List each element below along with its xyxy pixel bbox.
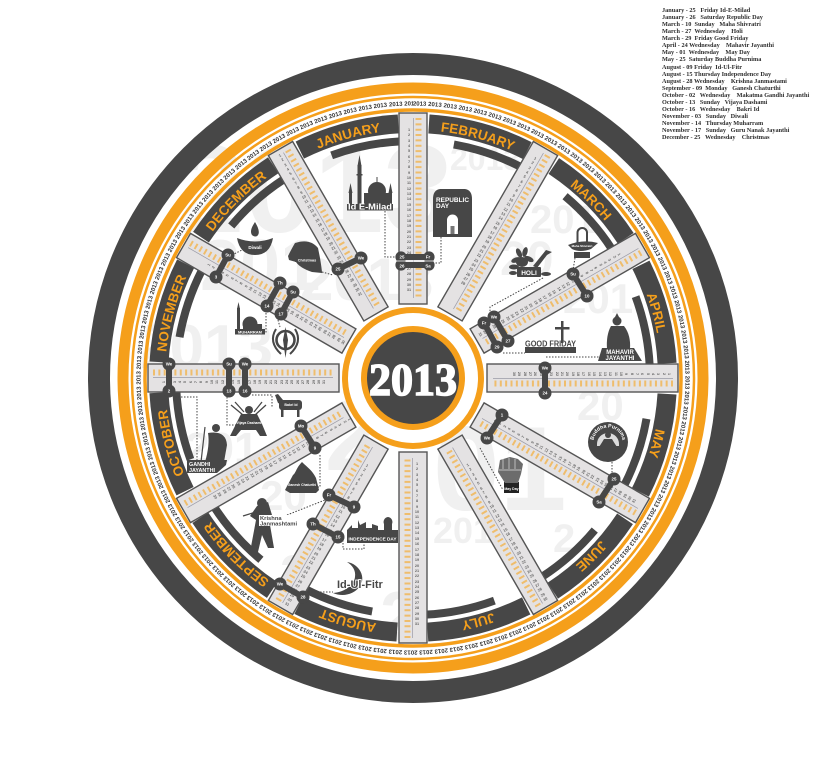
date marker: October 2: 2 (168, 389, 171, 394)
icon: Bakri Id goat: Bakri Id (284, 403, 298, 407)
watermark 2013 background: 201 (200, 226, 320, 306)
spoke: July: 1 2 3 4 5 6 7 8 9 10 11 12 13 14 15 16 17 18 19 20 21 22 23 24 25 26 27 28 29 30 31 (415, 462, 419, 626)
watermark 2013 background: 20 (260, 472, 307, 519)
icon: Buddha Purnima medallion (588, 422, 628, 462)
date marker: March 27 (488, 310, 514, 348)
spoke: October: 1 2 3 4 5 6 7 8 9 10 11 12 13 14 15 16 17 18 19 20 21 22 23 24 25 26 27 28 29 30 31 (162, 380, 326, 384)
month labels: AUGUST (318, 610, 376, 632)
icon: Khanda (273, 327, 298, 358)
spoke: February (438, 142, 558, 321)
icon: Krishna figure (243, 498, 305, 552)
icon: Krishna figure: Janmashtami (260, 522, 297, 528)
date marker: October 13: Su (226, 362, 232, 367)
inner month arcs (79, 44, 747, 712)
date marker: April 24: 24 (543, 391, 548, 396)
spoke: May: 1 2 3 4 5 6 7 8 9 10 11 12 13 14 15 16 17 18 19 20 21 22 23 24 25 26 27 28 29 30 31 (493, 419, 637, 504)
date marker: December 25 (332, 252, 368, 276)
icon: Muharram mosque: MUHARRAM (238, 330, 263, 334)
date marker: May 25: Sa (596, 500, 602, 505)
outer tyre ring (99, 64, 727, 692)
month labels: MARCH (570, 179, 612, 220)
spoke: April: 1 2 3 4 5 6 7 8 9 10 11 12 13 14 15 16 17 18 19 20 21 22 23 24 25 26 27 28 29 30 (512, 372, 671, 376)
date marker: September 9: 9 (314, 446, 317, 451)
watermark 2013 background: 2013 (135, 313, 273, 382)
watermark 2013 background: 2013 (300, 246, 433, 313)
date marker: January 25 and 26 (395, 251, 435, 271)
date marker: March 10: Su (570, 272, 576, 277)
icon: Republic Day India Gate: DAY (436, 203, 450, 210)
repeating 2013 text ring: 2013 2013 2013 2013 2013 2013 2013 2013 2013 2013 2013 2013 2013 2013 2013 2013 2013 2013 2013 2013 2013 2013 2013 2013 2013 2013 2013 2013 2013 2013 2013 2013 2013 2013 2013 2013 2013 2013 2013 2013 2013 2013 2013 2013 2013 2013 2013 2013 2013 2013 2013 2013 2013 2013 2013 2013 2013 2013 2013 2013 2013 2013 2013 2013 2013 2013 2013 2013 2013 2013 2013 2013 2013 2013 2013 2013 2013 2013 2013 2013 2013 2013 2013 2013 2013 2013 2013 2013 2013 2013 2013 2013 2013 2013 2013 2013 2013 2013 2013 2013 2013 2013 2013 2013 2013 2013 2013 2013 2013 2013 2013 2013 2013 (136, 101, 690, 655)
date marker: March 27: 27 (506, 339, 511, 344)
hub year: 2013 (369, 355, 457, 405)
date marker: November 14: 14 (265, 304, 270, 309)
watermark 2013 background: 2 (380, 577, 419, 655)
date marker: November 14: Th (277, 281, 283, 286)
date marker: January 25 and 26: Sa (425, 264, 431, 268)
central hub (345, 310, 481, 446)
month labels: APRIL (646, 294, 665, 334)
spoke: September (177, 403, 356, 523)
watermark 2013 background: 201 (563, 275, 633, 322)
date marker: October 13: 13 (227, 389, 232, 394)
icon: Independence Day fort: INDEPENDENCE DAY (348, 536, 396, 542)
date marker: May 1: 1 (501, 413, 504, 418)
date marker: November 17: Su (290, 290, 296, 295)
icon: Mahavir Jayanthi figure: JAYANTHI (606, 356, 635, 362)
date marker: January 25 and 26: Fr (426, 254, 430, 260)
month labels: NOVEMBER (157, 274, 186, 352)
thin orange inner rim (145, 110, 681, 646)
icon: Holi plant: HOLI (521, 270, 537, 277)
icon: Durga (230, 402, 267, 436)
spoke: January (399, 113, 427, 304)
date marker: May 25 (592, 472, 620, 508)
date marker: August 9: 9 (353, 505, 356, 510)
icon: Mahavir Jayanthi figure (598, 313, 642, 362)
watermark 2013 background: 2013 (433, 510, 513, 551)
date marker: April 24 (538, 362, 552, 400)
date marker: May 1: We (484, 436, 491, 441)
date marker: November 17: 17 (279, 312, 284, 317)
date marker: August 9: Fr (327, 493, 331, 498)
icon: Gandhi figure: GANDHI (189, 462, 211, 468)
icon: Independence Day fort (347, 517, 398, 543)
date marker: March 27: We (491, 315, 498, 320)
date marker: September 9 (294, 420, 322, 454)
spoke: April (487, 364, 678, 392)
month labels: MAY (650, 429, 665, 458)
month labels: JANUARY (317, 122, 379, 148)
spoke: March (468, 233, 649, 354)
month labels: JUNE (576, 541, 606, 572)
icon: Bakri Id goat (275, 394, 302, 417)
white text channel (138, 103, 688, 653)
icon: Christmas Santa: Christmas (298, 258, 316, 262)
spoke: March: 1 2 3 4 5 6 7 8 9 10 11 12 13 14 15 16 17 18 19 20 21 22 23 24 25 26 27 28 29 30 31 (477, 253, 621, 338)
date marker: May 25: 25 (612, 477, 617, 482)
date marker: October 2: We (166, 362, 173, 367)
icon: Id-Ul-Fitr crescent (333, 562, 384, 595)
icon: Ganesh (285, 462, 319, 493)
watermark 2013 background: 2 (280, 545, 308, 601)
date marker: October 2 (162, 358, 176, 398)
date marker: November 17 (274, 286, 300, 320)
icon: Gandhi figure: JAYANTHI (189, 468, 215, 474)
month labels: FEBRUARY (441, 122, 516, 150)
spoke: July (399, 452, 427, 643)
date marker: March 10: 10 (585, 294, 590, 299)
date marker: October 16 (238, 358, 252, 398)
spoke: September: 1 2 3 4 5 6 7 8 9 10 11 12 13 14 15 16 17 18 19 20 21 22 23 24 25 26 27 28 29 30 (212, 418, 351, 500)
icon: Maha Shivratri lingam (568, 228, 598, 258)
date marker: August 28: 28 (301, 595, 306, 600)
spoke: January: 1 2 3 4 5 6 7 8 9 10 11 12 13 14 15 16 17 18 19 20 21 22 23 24 25 26 27 28 29 30 31 (407, 128, 411, 292)
watermark 2013 background: 2 (325, 380, 381, 492)
spoke: December (268, 142, 388, 321)
date marker: August 9 (322, 488, 360, 514)
date marker: August 28 (274, 578, 310, 604)
date marker: November 3: 3 (215, 275, 218, 280)
date marker: March 29: Fr (482, 321, 486, 326)
spoke: November (177, 233, 359, 355)
spoke: November: 1 2 3 4 5 6 7 8 9 10 11 12 13 14 15 16 17 18 19 20 21 22 23 24 25 26 27 28 29 30 (207, 263, 346, 345)
date marker: September 9: Mo (298, 424, 304, 429)
month labels: SEPTEMBER (204, 522, 268, 586)
month labels: JULY (463, 614, 494, 630)
icon: Mahavir Jayanthi figure: MAHAVIR (606, 350, 634, 356)
icon: Buddha Purnima medallion: Buddha Purnima (590, 424, 625, 440)
icon: Id-E-Milad mosque: Id E-Milad (348, 202, 392, 212)
date marker: November 14 (260, 276, 286, 312)
icon: Republic Day India Gate (433, 189, 472, 237)
month labels: DECEMBER (206, 172, 267, 232)
date marker: March 10 (566, 268, 594, 302)
icon: Krishna figure: Krishna (260, 516, 282, 522)
date marker: November 3: Su (225, 253, 231, 258)
icon: Id-E-Milad mosque (347, 155, 393, 212)
month labels (157, 122, 665, 632)
icon: Durga: Vijaya Dashami (237, 421, 261, 425)
date marker: May 1 (480, 408, 508, 444)
icon: May Day fist (498, 457, 523, 493)
icon: Good Friday cross (525, 321, 577, 353)
spoke: June (438, 435, 561, 620)
holiday list: January - 25 Friday Id-E-Milad January - 26 Saturday Republic Day March - 10 Sunday Maha Shivratri March - 27 Wednesday Holi March - 29 Friday Good Friday April - 24 Wednesday Mahavir Jayanthi May - 01 Wednesday May Day May - 25 Saturday Buddha Purnima August - 09 Friday Id-Ul-Fitr August - 15 Thursday Independence Day August - 28 Wednesday Krishna Janmastami September - 09 Monday Ganesh Chaturthi October - 02 Wednesday Makatma Gandhi Jayanthi October - 13 Sunday Vijaya Dashami October - 16 Wednesday Bakri Id November - 03 Sunday Diwali November - 14 Thursday Muharram November - 17 Sunday Guru Nanak Jayanthi December - 25 Wednesday Christmas (662, 7, 809, 141)
icon: Ganesh: Ganesh Chaturthi (288, 483, 316, 487)
date marker: December 25: 25 (336, 267, 341, 272)
date marker: December 25: We (358, 256, 365, 261)
icon: Diwali lamp (237, 222, 273, 255)
date marker: March 29: 29 (495, 345, 500, 350)
watermark 2013 background: 2 (553, 517, 575, 561)
icon: Id-Ul-Fitr crescent: Id-Ul-Fitr (337, 579, 384, 591)
spoke: October (148, 364, 339, 392)
icon: Gandhi figure (187, 424, 227, 474)
date marker: October 13 (222, 358, 236, 398)
watermark 2013 background: 201 (530, 198, 597, 242)
icon: Muharram mosque (235, 302, 265, 334)
date marker: March 29 (478, 316, 504, 354)
watermark 2013 background: 201 (185, 424, 258, 473)
icon: Good Friday cross: GOOD FRIDAY (525, 340, 577, 348)
date marker: August 15: 15 (336, 535, 341, 540)
dotted connectors (175, 211, 612, 592)
spoke: May (470, 403, 649, 523)
icon: Republic Day India Gate: REPUBLIC (436, 197, 469, 204)
spoke: December: 1 2 3 4 5 6 7 8 9 10 11 12 13 14 15 16 17 18 19 20 21 22 23 24 25 26 27 28 29 30 31 (278, 153, 363, 297)
date marker: August 15 (306, 518, 344, 544)
watermark 2013 background: 20 (500, 233, 553, 286)
icon: Holi plant (509, 247, 552, 277)
watermark 2013 background: 2013 (175, 120, 453, 259)
date marker: October 16: 16 (243, 389, 248, 394)
icon: May Day fist: May Day (504, 487, 519, 491)
date marker: October 16: We (242, 362, 249, 367)
orange rim band (123, 88, 703, 668)
spoke: August: 1 2 3 4 5 6 7 8 9 10 11 12 13 14 15 16 17 18 19 20 21 22 23 24 25 26 27 28 29 30 31 (284, 463, 369, 607)
spoke: August (267, 435, 388, 616)
watermark 2013 background: 20 (577, 382, 624, 429)
date marker: November 3 (210, 248, 234, 284)
month labels: OCTOBER (158, 410, 183, 476)
spoke: February: 1 2 3 4 5 6 7 8 9 10 11 12 13 14 15 16 17 18 19 20 21 22 23 24 25 26 27 28 (460, 156, 537, 286)
thin orange outer rim (132, 97, 694, 659)
date marker: August 15: Th (310, 522, 316, 527)
watermark 2013 background: 2013 (450, 141, 521, 177)
icon: Diwali lamp: Diwali (248, 245, 262, 250)
date marker: April 24: We (542, 366, 549, 371)
date marker: August 28: We (277, 582, 284, 587)
spoke: June: 1 2 3 4 5 6 7 8 9 10 11 12 13 14 15 16 17 18 19 20 21 22 23 24 25 26 27 28 29 30 (466, 463, 548, 602)
date marker: January 25 and 26: 26 (400, 264, 405, 268)
watermark 2013 background: 01 (433, 402, 566, 536)
watermark 2013 background (135, 120, 633, 655)
icon: Christmas Santa (288, 241, 322, 273)
icon: Maha Shivratri lingam: Maha Shivratri (572, 244, 592, 248)
date marker: January 25 and 26: 25 (400, 254, 405, 260)
